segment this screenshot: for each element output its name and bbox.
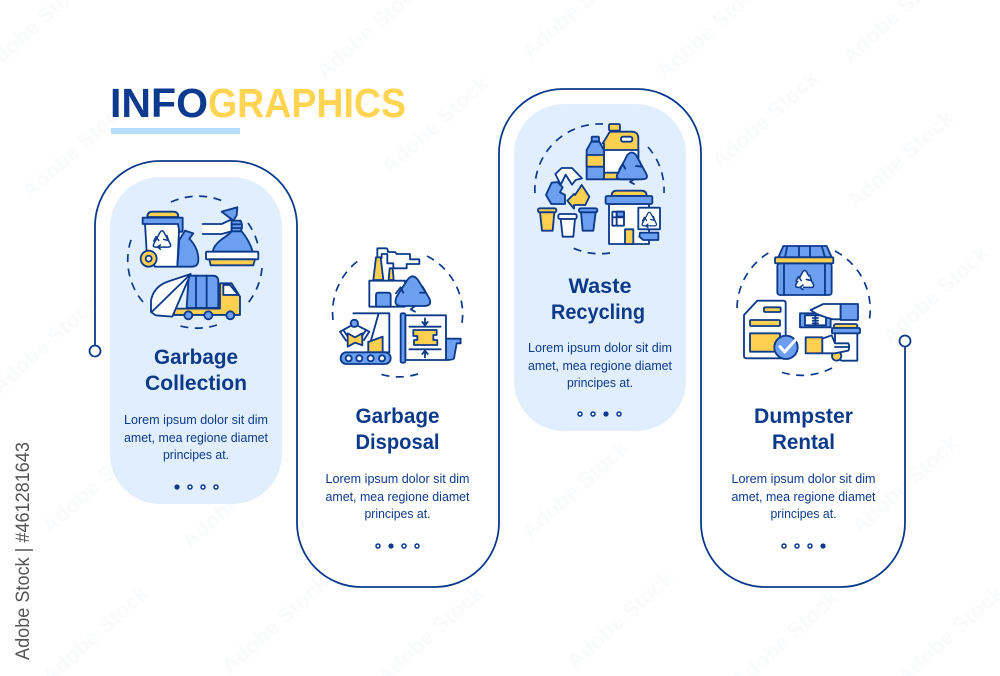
- body text: Lorem ipsum dolor sit dim: [732, 472, 876, 486]
- panel: garbage collection: [124, 196, 269, 490]
- heading: Disposal: [356, 431, 440, 454]
- dashed ring: [535, 124, 664, 254]
- faint stock watermarks: Adobe Stock: [877, 240, 994, 349]
- faint stock watermarks: Adobe Stock: [842, 105, 959, 214]
- body text: [732, 472, 876, 521]
- heading: Waste: [568, 275, 632, 298]
- body text: amet, mea regione diamet: [732, 490, 876, 504]
- body text: Lorem ipsum dolor sit dim: [124, 413, 268, 427]
- heading: Recycling: [551, 301, 645, 324]
- heading: Rental: [772, 431, 835, 454]
- heading: [551, 275, 645, 324]
- faint stock watermarks: Adobe Stock: [562, 565, 679, 674]
- step dots: [782, 543, 826, 549]
- dashed ring: [128, 196, 262, 328]
- dashed ring: [333, 256, 463, 377]
- body text: principes at.: [567, 376, 633, 390]
- body text: Lorem ipsum dolor sit dim: [326, 472, 470, 486]
- panel background: waste recycling: [514, 104, 686, 431]
- step dots: [174, 484, 218, 490]
- icon: dumpster, contract and payment: [744, 246, 860, 361]
- heading: Garbage: [356, 405, 440, 428]
- title: GRAPHICS: [208, 80, 406, 126]
- timeline start node: [90, 346, 100, 356]
- body text: [124, 413, 269, 462]
- faint stock watermarks: Adobe Stock: [37, 430, 154, 539]
- faint stock watermarks: Adobe Stock: [847, 430, 964, 539]
- connecting timeline outline: [95, 89, 905, 587]
- faint stock watermarks: Adobe Stock: [517, 435, 634, 544]
- body text: Lorem ipsum dolor sit dim: [528, 341, 672, 355]
- heading: Garbage: [154, 346, 238, 369]
- panel: dumpster rental: [732, 246, 876, 549]
- timeline end node: [900, 336, 910, 346]
- panel: waste recycling: [528, 124, 673, 417]
- body text: amet, mea regione diamet: [326, 490, 470, 504]
- icon: bottles, sorting bins and recycling point: [538, 124, 660, 244]
- heading: [145, 346, 247, 395]
- panel background: garbage collection: [110, 177, 282, 504]
- body text: principes at.: [770, 507, 836, 521]
- body text: principes at.: [163, 448, 229, 462]
- body text: amet, mea regione diamet: [124, 431, 269, 445]
- body text: principes at.: [364, 507, 430, 521]
- heading: Collection: [145, 372, 247, 395]
- heading: Dumpster: [754, 405, 853, 428]
- dashed ring: [737, 251, 870, 375]
- body text: amet, mea regione diamet: [528, 359, 673, 373]
- title underline: [111, 128, 240, 134]
- body text: [326, 472, 470, 521]
- title: [110, 80, 406, 126]
- heading: [356, 405, 440, 454]
- icon: factory, conveyor and compactor: [340, 248, 461, 364]
- faint stock watermarks: Adobe Stock: [217, 570, 334, 676]
- step dots: [376, 543, 419, 549]
- faint stock watermarks: Adobe Stock: [177, 445, 294, 554]
- title: INFO: [110, 80, 208, 126]
- panel: garbage disposal: [326, 248, 470, 549]
- faint stock watermarks: Adobe Stock: [707, 65, 824, 174]
- step dots: [578, 411, 621, 417]
- heading: [754, 405, 853, 454]
- faint stock watermarks: Adobe Stock: [17, 95, 134, 204]
- side stock id text: Adobe Stock | #461281643: [12, 442, 34, 660]
- body text: [528, 341, 673, 390]
- icon: bins, bag and garbage truck: [141, 207, 258, 319]
- faint stock watermarks: Adobe Stock: [377, 70, 494, 179]
